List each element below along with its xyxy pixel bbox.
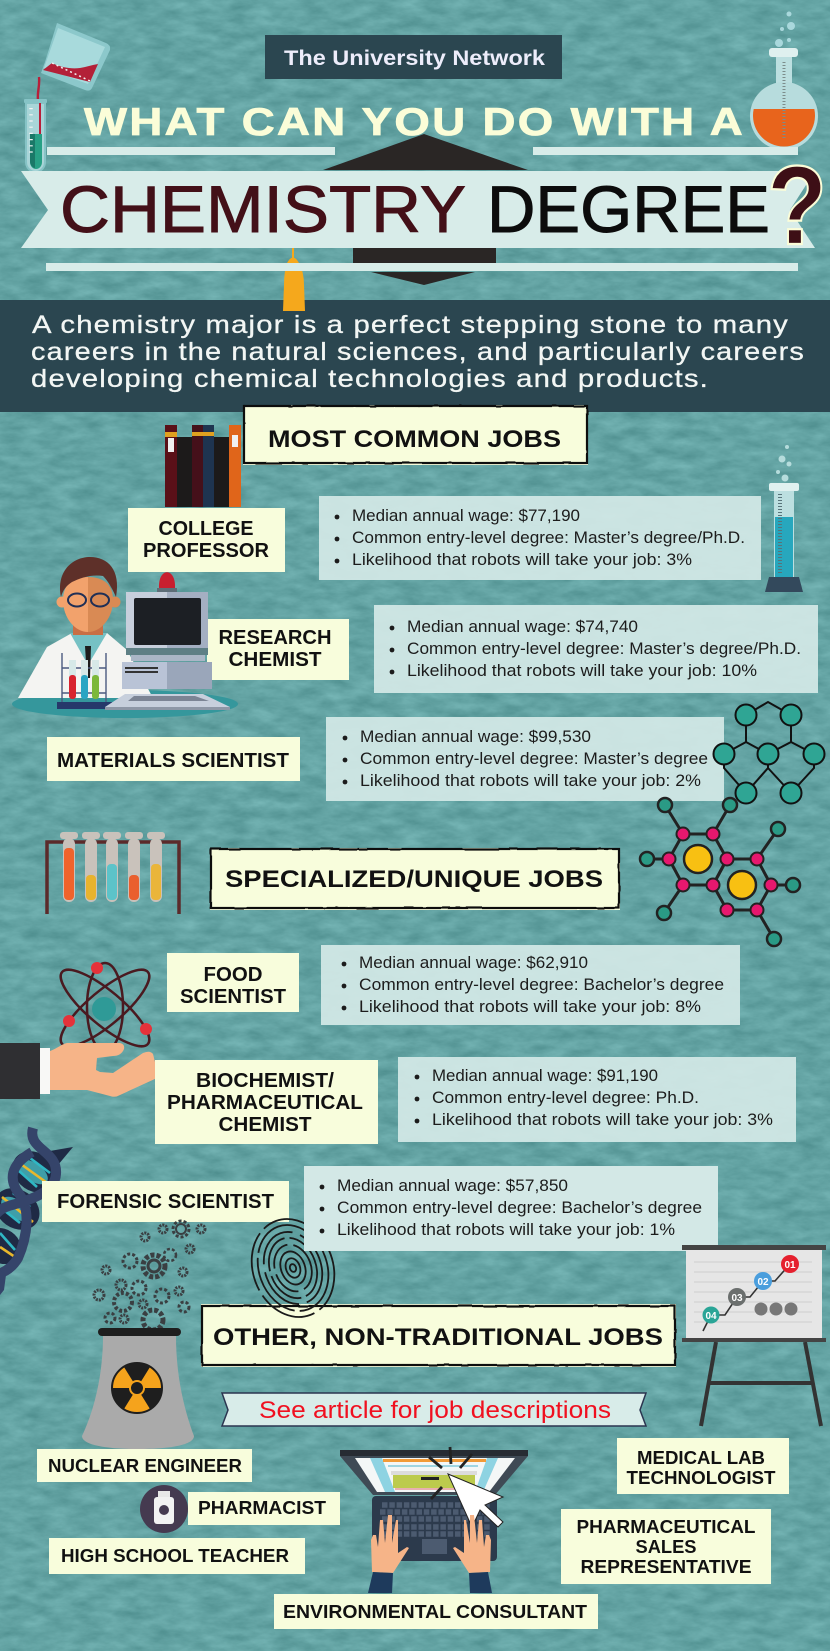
panel: research chemist facts: Median annual wage: $74,740: [407, 618, 638, 636]
icon: open hand: [0, 1043, 157, 1099]
title word degree: DEGREE: [487, 172, 770, 246]
ribbon: see article note: [222, 1393, 646, 1426]
icon: presentation board: 02: [757, 1277, 769, 1288]
panel: food scientist facts: Median annual wage: $62,910: [359, 954, 588, 972]
title ribbon: [21, 171, 815, 248]
publisher banner: [265, 35, 562, 79]
panel: forensic scientist facts: Median annual wage: $57,850: [337, 1177, 568, 1195]
icon: teal hexagon molecule: [714, 702, 824, 804]
label: food scientist: FOOD: [204, 964, 262, 986]
intro band: careers in the natural sciences, and particularly careers: [31, 338, 805, 366]
label: biochemist: PHARMACEUTICAL: [167, 1092, 363, 1114]
illustration: chemist at computer: [12, 557, 238, 718]
label: college professor: COLLEGE: [158, 518, 254, 540]
icon: presentation board: 03: [731, 1293, 743, 1304]
panel: materials scientist facts: Likelihood that robots will take your job: 2%: [360, 772, 701, 790]
publisher banner: The University Network: [284, 47, 545, 70]
heading: [210, 848, 620, 910]
heading: [201, 1304, 676, 1367]
label: biochemist: BIOCHEMIST/: [196, 1070, 334, 1092]
panel: college professor facts: Median annual wage: $77,190: [352, 507, 580, 525]
icon: books: [165, 425, 241, 507]
icon: cooling tower with gears: [82, 1221, 205, 1449]
section: most common jobs: [12, 405, 824, 804]
label: research chemist: CHEMIST: [228, 649, 322, 671]
panel: food scientist facts: Likelihood that robots will take your job: 8%: [359, 998, 701, 1016]
icon: atom: [51, 959, 159, 1057]
label: food scientist: [167, 953, 299, 1012]
label: medical lab technologist: TECHNOLOGIST: [626, 1468, 776, 1488]
section: specialized jobs: [0, 798, 800, 1295]
ribbon: see article note: See article for job descriptions: [259, 1397, 611, 1424]
icon: beaker pouring: [38, 23, 110, 134]
icon: presentation board: [682, 1245, 826, 1426]
intro band: developing chemical technologies and products.: [31, 365, 709, 393]
heading line one: WHAT CAN YOU DO WITH A: [84, 101, 745, 144]
panel: forensic scientist facts: Likelihood that robots will take your job: 1%: [337, 1221, 675, 1239]
label: pharmaceutical sales representative: [561, 1509, 771, 1584]
label: medical lab technologist: [617, 1438, 789, 1494]
panel: food scientist facts: [321, 945, 740, 1025]
icon: dna helix: [0, 1128, 73, 1295]
icon: round flask: [750, 12, 818, 150]
label: research chemist: [207, 619, 349, 680]
label: pharmaceutical sales representative: SALES: [636, 1537, 696, 1557]
label: research chemist: RESEARCH: [218, 627, 332, 649]
label: pharmacist: [188, 1492, 340, 1525]
icon: laptop with cursor: [340, 1447, 528, 1593]
section: other non-traditional jobs: [37, 1166, 826, 1629]
lower rule: [46, 263, 798, 271]
heading: [243, 405, 588, 465]
icon: presentation board: 04: [705, 1311, 717, 1322]
icon: pink and yellow molecule: [640, 798, 800, 946]
label: forensic scientist: [42, 1181, 289, 1222]
label: college professor: [128, 508, 285, 572]
header: [21, 12, 827, 285]
panel: materials scientist facts: Common entry-level degree: Master’s degree: [360, 750, 708, 768]
icon: graduated cylinder: [765, 445, 803, 592]
icon: presentation board: 01: [784, 1260, 796, 1271]
label: college professor: PROFESSOR: [143, 540, 270, 562]
gears: [94, 1221, 205, 1330]
upper rule right: [533, 147, 798, 155]
intro band: [0, 300, 830, 412]
panel: college professor facts: Likelihood that robots will take your job: 3%: [352, 551, 692, 569]
icon: fingerprint: [238, 1207, 348, 1329]
panel: college professor facts: [319, 496, 761, 580]
heading: SPECIALIZED/UNIQUE JOBS: [225, 866, 603, 893]
upper rule left: [47, 147, 335, 155]
heading: MOST COMMON JOBS: [268, 426, 561, 453]
label: environmental consultant: ENVIRONMENTAL CONSULTANT: [283, 1602, 587, 1622]
title word chemistry: CHEMISTRY: [60, 172, 466, 246]
label: food scientist: SCIENTIST: [180, 986, 286, 1008]
label: pharmaceutical sales representative: REPRESENTATIVE: [580, 1557, 752, 1577]
label: pharmacist: PHARMACIST: [198, 1498, 326, 1518]
intro band: A chemistry major is a perfect stepping stone to many: [32, 311, 789, 339]
panel: biochemist facts: Likelihood that robots will take your job: 3%: [432, 1111, 773, 1129]
cap band: [353, 248, 496, 285]
label: nuclear engineer: [37, 1449, 252, 1482]
panel: forensic scientist facts: [304, 1166, 718, 1251]
panel: materials scientist facts: Median annual wage: $99,530: [360, 728, 591, 746]
label: materials scientist: MATERIALS SCIENTIST: [57, 750, 289, 772]
panel: biochemist facts: [398, 1057, 796, 1142]
label: biochemist: CHEMIST: [218, 1114, 312, 1136]
label: forensic scientist: FORENSIC SCIENTIST: [57, 1191, 274, 1213]
label: biochemist: [155, 1060, 378, 1144]
panel: college professor facts: Common entry-level degree: Master’s degree/Ph.D.: [352, 529, 745, 547]
icon: tassel: [46, 248, 798, 311]
label: high school teacher: [49, 1538, 305, 1574]
panel: biochemist facts: Median annual wage: $91,190: [432, 1067, 658, 1085]
icon: test tube rack: [47, 832, 179, 914]
panel: biochemist facts: Common entry-level degree: Ph.D.: [432, 1089, 699, 1107]
panel: food scientist facts: Common entry-level degree: Bachelor’s degree: [359, 976, 724, 994]
label: medical lab technologist: MEDICAL LAB: [637, 1448, 765, 1468]
label: nuclear engineer: NUCLEAR ENGINEER: [48, 1456, 242, 1476]
graduation cap top: [323, 134, 528, 170]
heading: OTHER, NON-TRADITIONAL JOBS: [213, 1324, 663, 1351]
label: materials scientist: [47, 737, 300, 781]
panel: forensic scientist facts: Common entry-level degree: Bachelor’s degree: [337, 1199, 702, 1217]
icon: medicine bottle: [140, 1485, 188, 1533]
panel: research chemist facts: Common entry-level degree: Master’s degree/Ph.D.: [407, 640, 801, 658]
label: high school teacher: HIGH SCHOOL TEACHER: [61, 1546, 289, 1566]
panel: materials scientist facts: [326, 717, 724, 801]
panel: research chemist facts: Likelihood that robots will take your job: 10%: [407, 662, 757, 680]
label: pharmaceutical sales representative: PHARMACEUTICAL: [576, 1517, 756, 1537]
icon: test tube left: [24, 99, 47, 172]
panel: research chemist facts: [374, 605, 818, 693]
label: environmental consultant: [274, 1594, 598, 1629]
